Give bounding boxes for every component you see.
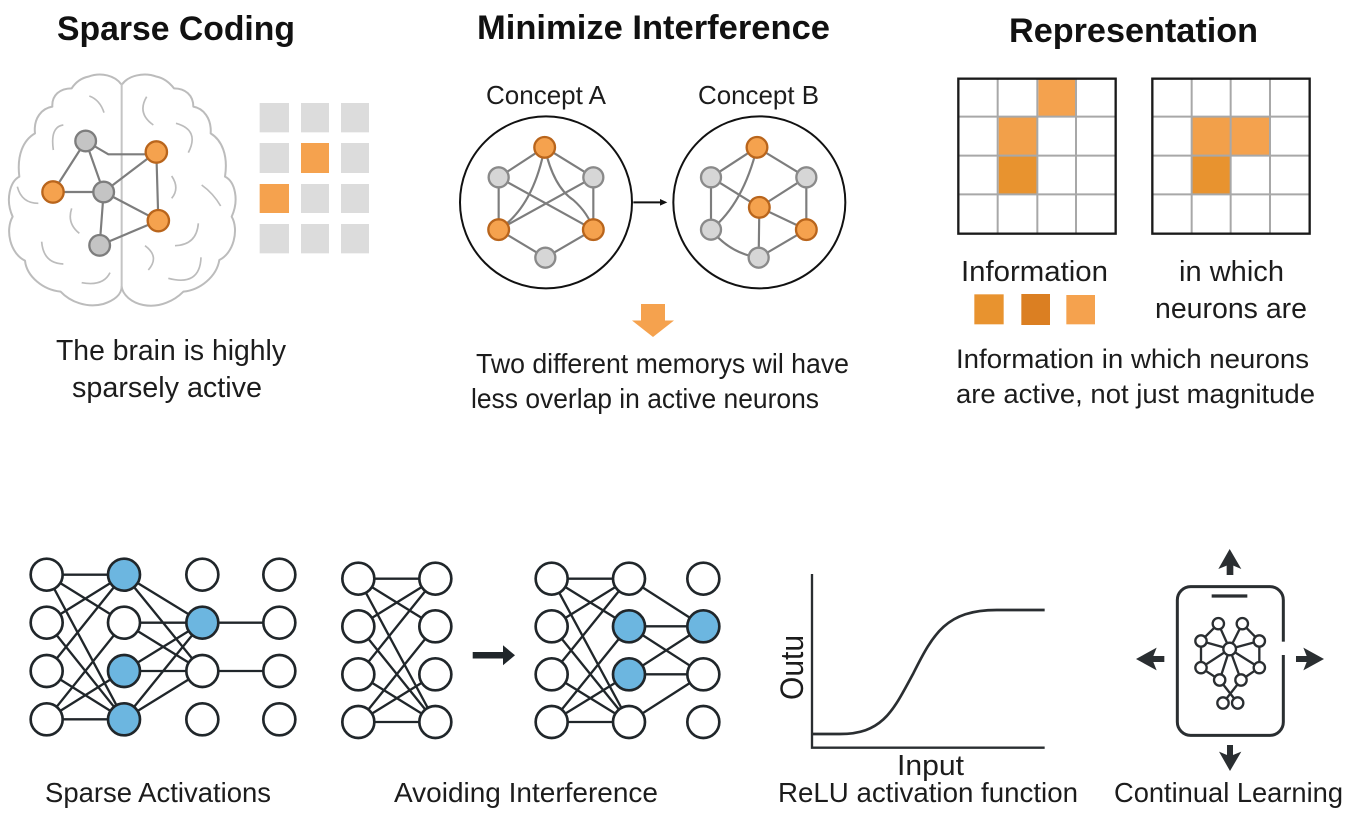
label: in which neurons are: neurons are (1155, 293, 1307, 325)
text: brain sparsity: The brain is highly (56, 335, 286, 367)
text: less overlap: Two different memorys wil have (476, 348, 849, 379)
text: less overlap: less overlap in active neurons (471, 383, 819, 414)
label: information: Information (961, 256, 1108, 288)
heading: representation: Representation (1009, 12, 1258, 50)
panel: representation (956, 12, 1315, 409)
diagram: concept a network (460, 116, 632, 288)
panel: activation function (774, 574, 1078, 808)
arrow: orange down (632, 304, 674, 337)
text: which neurons are active (956, 344, 1315, 409)
diagram: separated network (536, 563, 719, 738)
diagram: concept b network (673, 116, 845, 288)
label: continual learning: Continual Learning (1114, 777, 1343, 808)
text: which neurons are active: Information in which neurons (956, 344, 1309, 374)
text: brain sparsity: sparsely active (72, 372, 262, 404)
label: concept a: Concept A (486, 80, 607, 110)
label: relu activation function: ReLU activation function (778, 777, 1078, 808)
arrow: network transition (473, 645, 515, 665)
heading: sparse coding: Sparse Coding (57, 10, 295, 48)
arrows: four directions (1136, 549, 1324, 771)
heading: minimize interference: Minimize Interference (477, 9, 830, 47)
diagram: dense network (342, 563, 451, 738)
axis label: input: Input (897, 750, 964, 782)
panel: continual learning (1114, 549, 1343, 808)
sparse activity grid (260, 103, 369, 253)
arrow: concept a to b (633, 199, 667, 206)
text: which neurons are active: are active, not just magnitude (956, 379, 1315, 409)
label: sparse activations: Sparse Activations (45, 777, 271, 808)
legend swatches (974, 294, 1095, 325)
panel: sparse coding (9, 10, 369, 404)
label: in which neurons are (1155, 256, 1307, 325)
icon: device with network (1177, 587, 1285, 735)
diagram: sparse network (31, 559, 295, 735)
panel: minimize interference (460, 9, 849, 414)
grid: second pattern (1152, 79, 1310, 234)
label: concept b: Concept B (698, 80, 819, 110)
icon: brain network (9, 75, 236, 306)
text: brain sparsity (56, 335, 286, 404)
text: less overlap (471, 348, 849, 414)
label: in which neurons are: in which (1179, 256, 1284, 288)
panel: avoiding interference (342, 563, 719, 808)
chart: activation curve (812, 574, 1045, 748)
grid: first pattern (958, 79, 1116, 234)
axis label: output: Outu (774, 635, 810, 700)
label: avoiding interference: Avoiding Interference (394, 777, 658, 808)
panel: sparse activations (31, 559, 295, 808)
